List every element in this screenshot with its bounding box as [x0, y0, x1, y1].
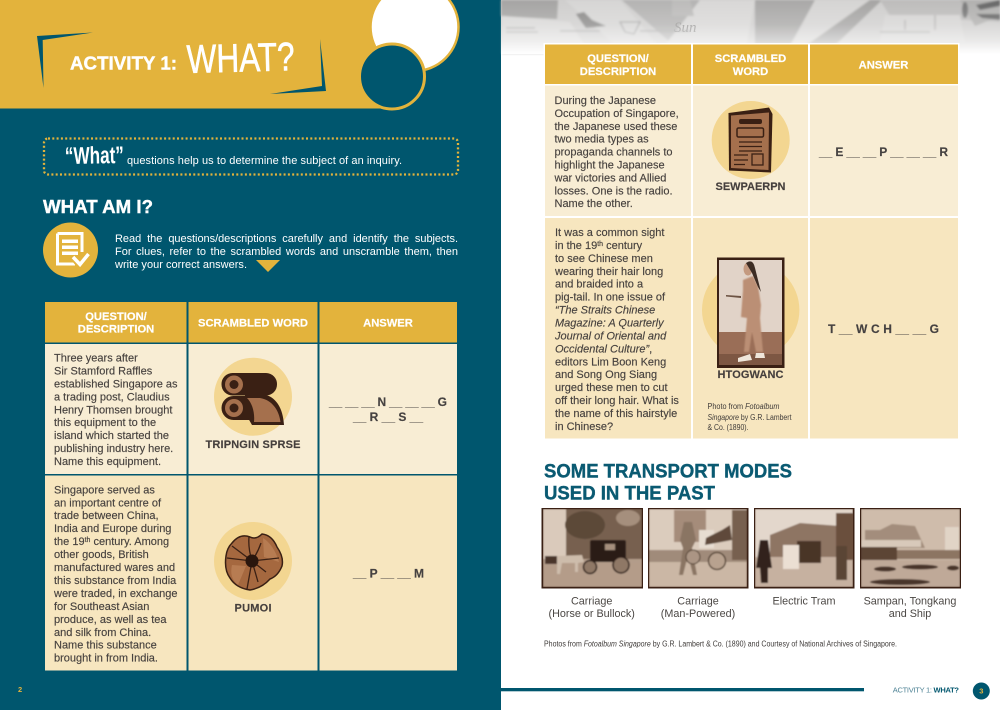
icon: printing press rollers — [214, 358, 292, 436]
question text 2: manufactured wares and — [54, 562, 175, 574]
title bracket top left — [37, 32, 93, 88]
question text 1: island which started the — [54, 430, 169, 442]
left page — [0, 0, 501, 710]
photo: rickshaw — [648, 508, 748, 588]
table: right — [544, 43, 960, 440]
newspaper collage banner: Sun — [674, 20, 696, 36]
scrambled word 4: HTOGWANC — [718, 369, 784, 381]
table header — [545, 44, 958, 84]
answer 4: T __ W C H __ __ G — [828, 322, 939, 336]
question text 2: th — [85, 537, 91, 544]
question text 1 — [54, 353, 178, 468]
question text 1: Three years after — [54, 353, 138, 365]
question text 4: Journal of Oriental and — [554, 330, 667, 342]
instructions — [114, 233, 458, 271]
question text 4: Occidental Culture”, — [555, 343, 652, 355]
photo captions: Electric Tram — [772, 595, 836, 607]
photo captions: Carriage — [677, 595, 719, 607]
question text 2: India and Europe during — [54, 523, 171, 535]
answer 1: __ __ __ N __ __ __ G — [328, 395, 447, 409]
photo: sampan and ships — [860, 508, 961, 588]
photo captions: (Horse or Bullock) — [548, 608, 635, 620]
title bracket bottom right — [270, 39, 326, 94]
heading: what am i: WHAT AM I? — [43, 196, 153, 217]
question text 1: Name this equipment. — [54, 456, 161, 468]
question text 4: the name of this hairstyle — [555, 408, 677, 420]
question text 3: Name the other. — [554, 198, 633, 210]
question text 2: Name this substance — [54, 640, 157, 652]
instructions: write your correct answers. — [114, 259, 247, 271]
question text 4: th — [597, 241, 603, 248]
question text 4: “The Straits Chinese — [555, 305, 655, 317]
table header — [45, 302, 457, 342]
table header: SCRAMBLED WORD — [198, 318, 308, 330]
heading: transport modes: USED IN THE PAST — [544, 482, 715, 504]
question text 2: and silk from China. — [54, 627, 151, 639]
table header: DESCRIPTION — [78, 324, 154, 336]
page number 3 — [973, 682, 990, 700]
photo: electric tram — [754, 508, 854, 588]
question text 4 — [554, 227, 679, 433]
row 1 — [545, 86, 958, 216]
photo captions: and Ship — [889, 608, 931, 620]
photo captions: (Man-Powered) — [661, 608, 735, 620]
question text 2: other goods, British — [54, 549, 149, 561]
question text 4: and Song Ong Siang — [555, 369, 657, 381]
question text 4: urged these men to cut — [555, 382, 668, 394]
question text 4: century — [603, 240, 643, 252]
photo credit: Photo from Fotoalbum — [708, 402, 780, 411]
question text 3: the Japanese used these — [554, 121, 677, 133]
table header: SCRAMBLED — [715, 53, 786, 65]
question text 2: for Southeast Asian — [54, 601, 149, 613]
photo: man with queue — [717, 258, 784, 368]
question text 2 — [53, 484, 178, 665]
page number 2: 2 — [18, 685, 22, 694]
question text 3: highlight the Japanese — [554, 160, 665, 172]
scrambled word 2: PUMOI — [234, 603, 272, 615]
row 2 — [45, 476, 457, 670]
question text 3: two media types as — [554, 134, 649, 146]
instructions: Read the questions/descriptions carefully and identify the subjects. — [115, 233, 458, 245]
intro callout — [44, 138, 458, 174]
question text 3: During the Japanese — [554, 95, 656, 107]
question text 4: wearing their hair long — [554, 266, 663, 278]
title: WHAT? — [186, 35, 295, 82]
intro callout: “What” — [65, 142, 124, 170]
question text 2: trade between China, — [54, 510, 159, 522]
question text 4: in the 19 — [555, 240, 597, 252]
photo captions — [548, 595, 956, 620]
row 2 — [545, 218, 958, 438]
table: left — [45, 302, 457, 670]
photo captions: Sampan, Tongkang — [864, 595, 956, 607]
question text 4: off their long hair. What is — [555, 395, 679, 407]
question text 3: Occupation of Singapore, — [554, 108, 679, 120]
intro callout: questions help us to determine the subject of an inquiry. — [127, 155, 402, 167]
newspaper collage banner — [501, 0, 1000, 54]
photo: horse carriage — [542, 508, 643, 588]
table header: DESCRIPTION — [580, 66, 656, 78]
question text 2: Singapore served as — [54, 484, 155, 496]
table header: ANSWER — [363, 318, 413, 330]
footer rule — [501, 688, 864, 691]
question text 2: an important centre of — [54, 497, 162, 509]
scrambled word 3: SEWPAERPN — [716, 181, 786, 193]
white circle — [370, 0, 458, 71]
teal circle — [360, 44, 424, 109]
photo credit: Singapore by G.R. Lambert — [708, 413, 792, 422]
question text 2: brought in from India. — [54, 653, 158, 665]
answer 2: __ P __ __ M — [352, 567, 424, 581]
question text 3 — [554, 95, 679, 210]
question text 4: and braided into a — [555, 279, 644, 291]
question text 1: publishing industry here. — [54, 443, 173, 455]
header band — [0, 0, 392, 108]
question text 2: produce, as well as tea — [54, 614, 167, 626]
photo captions: Carriage — [571, 595, 612, 607]
question text 1: this equipment to the — [54, 417, 156, 429]
photo credit line: Photos from Fotoalbum Singapore by G.R. Lambert & Co. (1890) and Courtesy of National Archives of Singapore. — [544, 640, 897, 649]
question text 4: to see Chinese men — [555, 253, 653, 265]
question text 4: in Chinese? — [555, 421, 613, 433]
question text 3: propaganda channels to — [554, 147, 673, 159]
question text 1: Sir Stamford Raffles — [54, 366, 153, 378]
question text 4: Magazine: A Quarterly — [555, 318, 665, 330]
footer label: ACTIVITY 1: WHAT? — [893, 686, 959, 695]
question text 4: pig-tail. In one issue of — [555, 292, 666, 304]
table header: ANSWER — [859, 60, 908, 72]
table header: QUESTION/ — [587, 53, 649, 65]
question text 1: a trading post, Claudius — [54, 391, 170, 403]
scrambled word 1: TRIPNGIN SPRSE — [206, 439, 300, 451]
icon backdrop circle — [702, 261, 799, 359]
photo credit — [708, 402, 792, 432]
question text 3: war victories and Allied — [554, 172, 666, 184]
icon: opium — [214, 522, 292, 600]
icon: checklist — [43, 222, 98, 278]
heading: transport modes: SOME TRANSPORT MODES — [544, 461, 792, 483]
question text 2: century. Among — [90, 536, 169, 548]
row 1 — [45, 344, 457, 474]
right page — [501, 0, 1000, 710]
question text 2: this substance from India — [54, 575, 177, 587]
question text 1: Henry Thomsen brought — [54, 404, 172, 416]
page number 3: 3 — [979, 687, 983, 696]
icon: newspaper — [712, 101, 790, 179]
question text 1: established Singapore as — [54, 378, 178, 390]
heading: transport modes — [544, 461, 792, 504]
photo credit: & Co. (1890). — [708, 423, 748, 432]
question text 4: It was a common sight — [555, 227, 664, 239]
question text 3: losses. One is the radio. — [554, 185, 673, 197]
answer 1 — [328, 395, 447, 424]
question text 4: editors Lim Boon Keng — [555, 356, 666, 368]
answer 3: __ E __ __ P __ __ __ R — [818, 145, 948, 159]
question text 2: were traded, in exchange — [53, 588, 178, 600]
table header: QUESTION/ — [85, 311, 147, 323]
instructions: For clues, refer to the scrambled words and unscramble them, then — [115, 246, 458, 258]
title — [70, 35, 295, 82]
arrow: down triangle — [256, 260, 280, 272]
table header: WORD — [733, 66, 768, 78]
answer 1: __ R __ S __ — [352, 410, 423, 424]
question text 2: the 19 — [54, 536, 85, 548]
title: ACTIVITY 1: — [70, 54, 177, 74]
